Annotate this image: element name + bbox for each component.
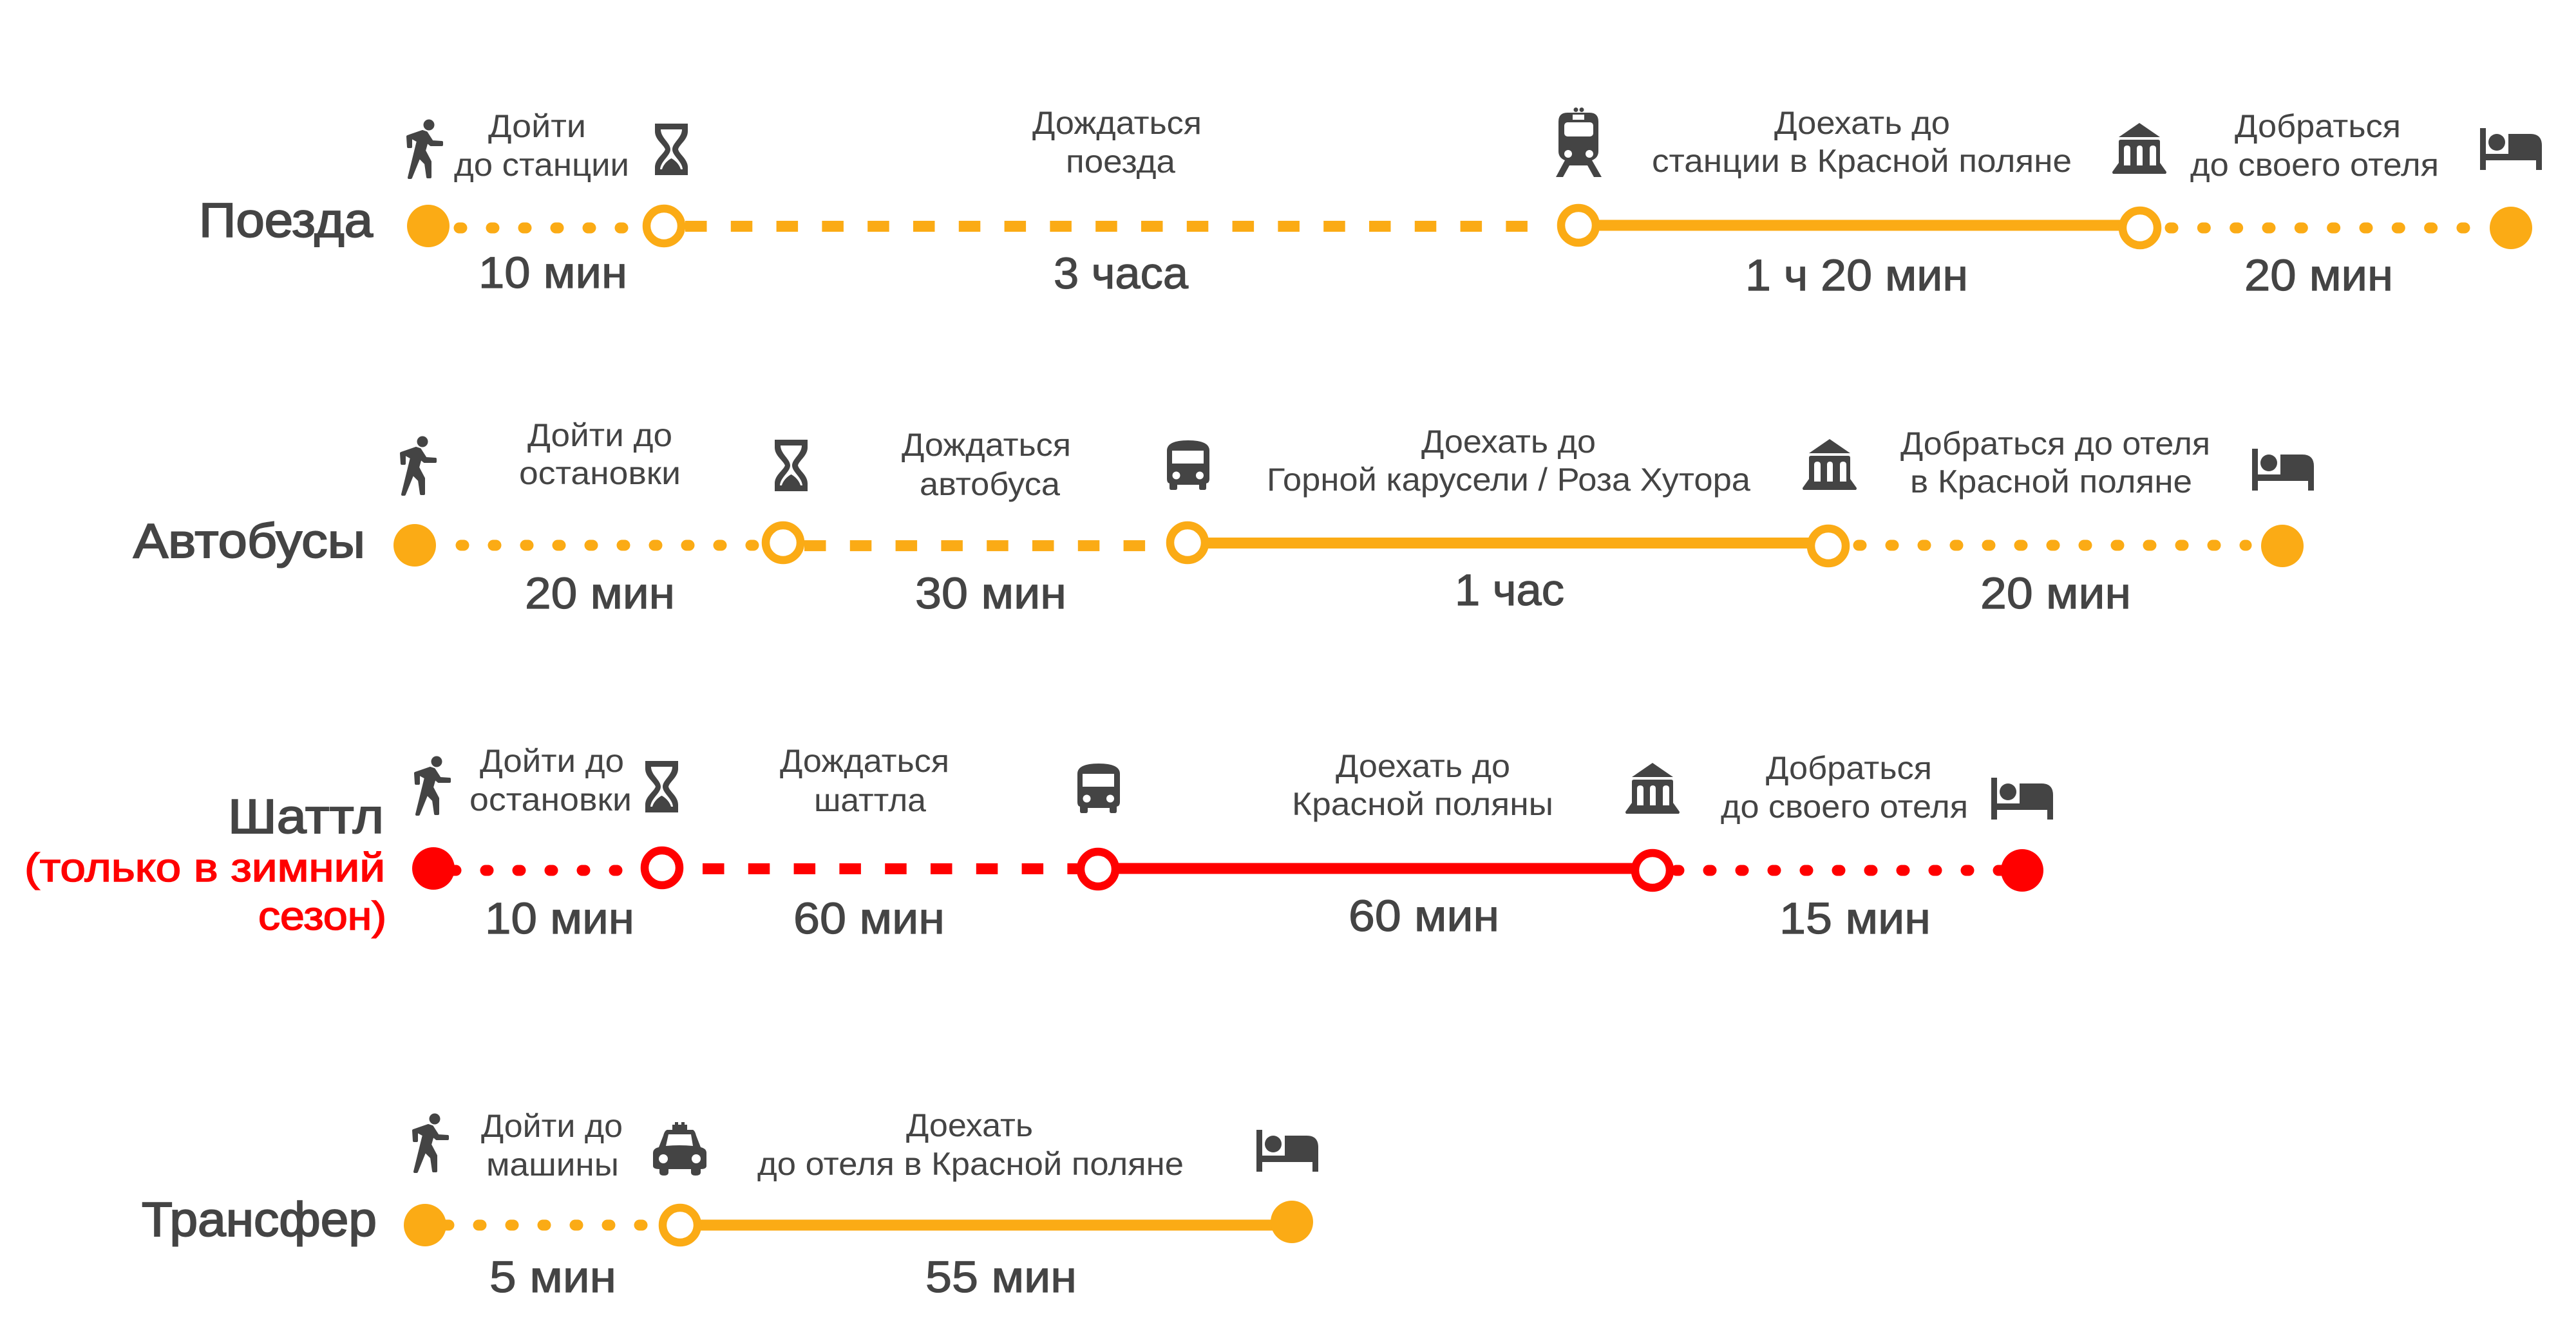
text: ride to Krasnaya Polyana: Красной поляны	[1292, 786, 1553, 822]
text: wait for shuttle: шаттла	[814, 782, 926, 818]
durations: 5 мин	[489, 1252, 616, 1302]
route line	[404, 1201, 1313, 1246]
note: winter only: сезон)	[258, 894, 386, 939]
text: get to hotel: Добраться	[1766, 750, 1932, 786]
text: wait for shuttle: Дождаться	[780, 743, 949, 779]
icon: hourglass	[645, 761, 678, 812]
durations: 1 час	[1455, 565, 1564, 615]
note: winter only	[24, 846, 386, 939]
text: get to hotel	[1900, 426, 2210, 500]
text: get to hotel	[2190, 108, 2439, 183]
durations: 20 мин	[525, 568, 675, 618]
text: walk to stop: остановки	[469, 782, 632, 818]
text: walk to car	[481, 1108, 623, 1183]
text: wait for bus	[902, 427, 1071, 502]
text: wait for train: поезда	[1066, 144, 1175, 180]
route row: Поезда	[199, 105, 2542, 300]
route row: Трансфер	[142, 1107, 1318, 1302]
text: walk to stop: Дойти до	[527, 417, 672, 453]
text: ride to hotel: Доехать	[906, 1107, 1033, 1143]
icon: bed	[2480, 128, 2542, 170]
icon: station building	[1803, 439, 1857, 490]
text: ride to Gorky / Rosa: Доехать до	[1421, 424, 1596, 460]
route line	[393, 524, 2304, 567]
durations: 10 мин	[485, 894, 634, 943]
icon: hourglass	[655, 124, 688, 175]
durations: 55 мин	[925, 1252, 1077, 1302]
text: get to hotel	[1721, 750, 1968, 825]
icon: walking person	[408, 120, 442, 178]
text: walk to car: машины	[486, 1147, 619, 1183]
text: wait for train: Дождаться	[1032, 105, 1202, 141]
text: walk to stop	[519, 417, 681, 491]
text: ride to hotel: до отеля в Красной поляне	[757, 1146, 1184, 1182]
text: walk to stop	[469, 743, 632, 818]
text: ride to Krasnaya Polyana: Доехать до	[1336, 748, 1510, 784]
text: ride to hotel	[757, 1107, 1184, 1182]
text: ride to Gorky / Rosa	[1267, 424, 1750, 498]
text: walk to stop: Дойти до	[480, 743, 624, 779]
text: ride to station	[1652, 105, 2072, 179]
route row: Автобусы	[133, 417, 2314, 618]
note: winter only: (только в зимний	[24, 846, 385, 890]
durations: 60 мин	[1349, 891, 1499, 941]
durations	[489, 1252, 1077, 1302]
text: wait for bus: автобуса	[920, 466, 1060, 502]
icon: walking person	[401, 436, 435, 494]
icon: station building	[1625, 763, 1680, 814]
text: get to hotel: Добраться	[2235, 108, 2401, 144]
route line	[412, 847, 2043, 892]
icon: bed	[2252, 449, 2314, 491]
durations	[478, 248, 2393, 300]
text: get to hotel: в Красной поляне	[1910, 464, 2192, 500]
icon: walking person	[415, 756, 450, 814]
icon: station building	[2112, 123, 2166, 174]
durations: 20 мин	[2244, 250, 2393, 300]
heading: Трансфер: Трансфер	[142, 1192, 377, 1246]
icon: train	[1556, 108, 1602, 177]
text: get to hotel: Добраться до отеля	[1900, 426, 2210, 462]
icon: bed	[1256, 1130, 1318, 1172]
durations: 3 часа	[1054, 249, 1189, 298]
text: walk to stop: остановки	[519, 455, 681, 491]
text: wait for train	[1032, 105, 1202, 180]
text: walk to station	[454, 108, 629, 183]
icon: bed	[1991, 778, 2053, 820]
text: wait for shuttle	[780, 743, 949, 818]
heading: Автобусы: Автобусы	[133, 514, 365, 568]
heading: Шаттл: Шаттл	[228, 789, 384, 843]
durations	[525, 565, 2131, 618]
icon: taxi	[653, 1122, 706, 1176]
text: get to hotel: до своего отеля	[2190, 147, 2439, 183]
durations: 60 мин	[793, 894, 945, 943]
durations: 10 мин	[478, 248, 627, 297]
durations: 1 ч 20 мин	[1745, 250, 1968, 300]
durations: 15 мин	[1779, 894, 1931, 943]
text: get to hotel: до своего отеля	[1721, 789, 1968, 825]
text: walk to car: Дойти до	[481, 1108, 623, 1144]
text: walk to station: Дойти	[488, 108, 586, 144]
text: wait for bus: Дождаться	[902, 427, 1071, 463]
text: ride to station: Доехать до	[1774, 105, 1950, 141]
durations	[485, 891, 1931, 943]
icon: hourglass	[775, 440, 808, 491]
route line	[407, 205, 2532, 249]
text: ride to Gorky / Rosa: Горной карусели / Роза Хутора	[1267, 462, 1750, 498]
icon: bus	[1167, 440, 1209, 490]
route row: Шаттл	[24, 743, 2053, 943]
icon: walking person	[413, 1114, 448, 1172]
durations: 20 мин	[1980, 568, 2131, 618]
icon: bus	[1077, 764, 1120, 813]
heading: Поезда: Поезда	[199, 193, 373, 247]
text: ride to Krasnaya Polyana	[1292, 748, 1553, 822]
durations: 30 мин	[915, 568, 1066, 618]
text: ride to station: станции в Красной поляне	[1652, 143, 2072, 179]
text: walk to station: до станции	[454, 147, 629, 183]
